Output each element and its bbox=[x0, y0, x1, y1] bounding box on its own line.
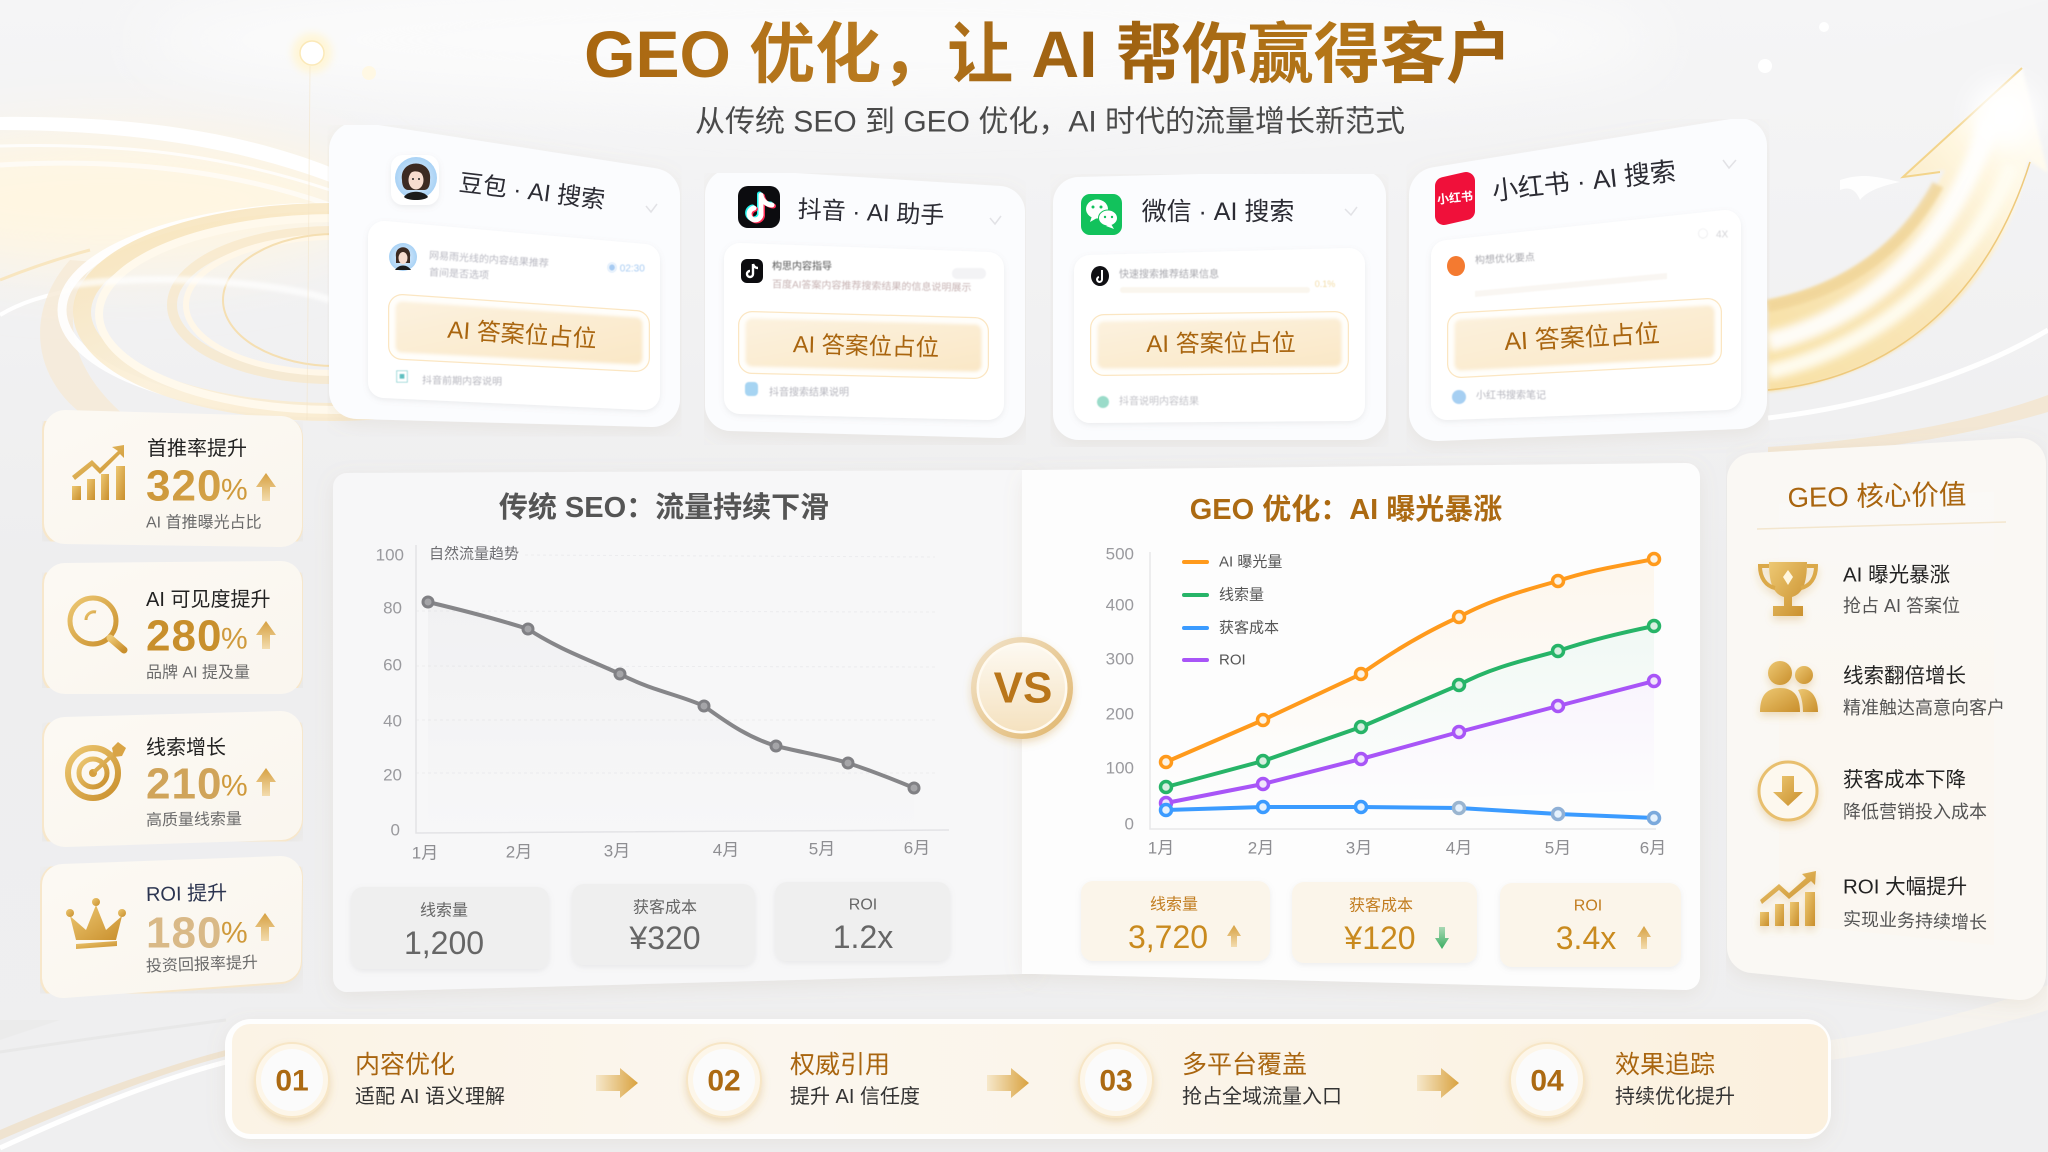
line chart: GEO metrics bbox=[1106, 544, 1666, 858]
stat: ROI up: 3.4x bbox=[1556, 920, 1616, 956]
stat: leads: 线索量 bbox=[420, 902, 468, 920]
stat: ROI bbox=[775, 882, 950, 961]
number badge: 04 bbox=[1530, 1064, 1564, 1098]
line chart: GEO metrics: 2月 bbox=[1248, 838, 1274, 858]
arrow bbox=[596, 1068, 638, 1098]
icon: crown bbox=[66, 898, 126, 949]
legend bbox=[1182, 554, 1282, 668]
line chart: GEO metrics: 0 bbox=[1125, 814, 1134, 834]
panel: traditional SEO bbox=[347, 484, 1022, 978]
stat: acquisition cost: 获客成本 bbox=[633, 898, 697, 916]
stat: acquisition cost bbox=[572, 884, 755, 965]
line chart: organic traffic: 100 bbox=[376, 546, 404, 564]
answer position box: AI 答案位占位 bbox=[1504, 320, 1660, 356]
line chart: organic traffic: 0 bbox=[391, 820, 400, 840]
card title: 抖音 · AI 助手 bbox=[797, 196, 945, 230]
number badge bbox=[687, 1043, 761, 1117]
inner result card: 0.1% bbox=[1315, 279, 1335, 289]
value: ROI lift bbox=[1760, 871, 1987, 933]
heading: 传统 SEO：流量持续下滑 bbox=[499, 491, 829, 524]
icon: xiaohongshu bbox=[1436, 181, 1474, 216]
line chart: GEO metrics: 1月 bbox=[1148, 838, 1174, 858]
line chart: GEO metrics: 3月 bbox=[1346, 838, 1372, 858]
panel: metric AI visibility bbox=[64, 582, 281, 682]
arrow up bbox=[256, 473, 276, 501]
VS badge: VS bbox=[994, 664, 1052, 712]
value: cost reduction bbox=[1759, 762, 1987, 822]
arrow bbox=[1417, 1068, 1459, 1098]
stat: leads up: 3,720 bbox=[1128, 919, 1208, 955]
panel: metric ROI bbox=[62, 877, 281, 978]
arrow up bbox=[256, 621, 276, 649]
panel: metric first recommendation: 首推率提升 bbox=[147, 437, 247, 460]
number badge bbox=[1079, 1043, 1153, 1117]
line chart: organic traffic: 自然流量趋势 bbox=[429, 546, 519, 562]
step 04: 持续优化提升 bbox=[1615, 1085, 1735, 1108]
step 02: 权威引用 bbox=[790, 1051, 890, 1079]
value: leads doubled: 线索翻倍增长 bbox=[1843, 664, 1966, 688]
icon: growth chart bbox=[1760, 871, 1816, 926]
step 01 bbox=[255, 1043, 505, 1117]
line chart: GEO metrics: 100 bbox=[1106, 758, 1134, 778]
stat: cost down: ¥120 bbox=[1343, 920, 1416, 956]
legend: AI 曝光量 bbox=[1219, 554, 1282, 570]
line chart: GEO metrics: 400 bbox=[1106, 596, 1134, 614]
answer position box bbox=[752, 325, 975, 365]
line chart: GEO metrics: 4月 bbox=[1446, 838, 1472, 858]
line chart: GEO metrics: 500 bbox=[1106, 544, 1134, 564]
value: cost reduction: 获客成本下降 bbox=[1843, 768, 1966, 792]
stat: leads bbox=[351, 887, 549, 969]
chevron bbox=[990, 216, 1001, 224]
line chart: organic traffic: 2月 bbox=[506, 842, 532, 862]
line chart: organic traffic bbox=[376, 545, 949, 862]
line chart: organic traffic: 80 bbox=[383, 598, 402, 618]
icon: douyin bbox=[738, 186, 780, 228]
chevron bbox=[646, 204, 657, 212]
icon: target bbox=[68, 742, 126, 798]
step 04 bbox=[1510, 1043, 1735, 1117]
line chart: organic traffic: 20 bbox=[383, 766, 402, 784]
stat: cost down: 获客成本 bbox=[1349, 896, 1413, 914]
arrow up bbox=[255, 913, 275, 941]
panel: metric AI visibility: AI 可见度提升 bbox=[146, 588, 270, 611]
value: AI exposure bbox=[1760, 562, 1960, 616]
value: leads doubled: 精准触达高意向客户 bbox=[1843, 698, 2005, 718]
arrow bbox=[987, 1068, 1029, 1098]
panel: metric ROI: 投资回报率提升 bbox=[146, 954, 258, 975]
heading: GEO 优化：AI 曝光暴涨 bbox=[1190, 493, 1502, 526]
panel: metric leads bbox=[64, 732, 281, 829]
card title: 微信 · AI 搜索 bbox=[1142, 198, 1294, 226]
stat: cost down bbox=[1292, 882, 1477, 963]
panel: doubao card bbox=[357, 150, 657, 399]
icon: growth bars bbox=[72, 445, 125, 500]
stat: ROI up bbox=[1500, 883, 1681, 967]
value: AI exposure: 抢占 AI 答案位 bbox=[1843, 596, 1960, 616]
value: ROI lift: ROI 大幅提升 bbox=[1843, 876, 1967, 898]
inner result card bbox=[1090, 264, 1349, 408]
panel: metric first recommendation bbox=[64, 431, 281, 532]
arrow up bbox=[256, 768, 276, 796]
step 01: 适配 AI 语义理解 bbox=[355, 1085, 505, 1108]
stat: ROI: 1.2x bbox=[833, 919, 893, 955]
step 02: 提升 AI 信任度 bbox=[790, 1085, 920, 1108]
line chart: GEO metrics: 300 bbox=[1106, 650, 1134, 668]
number badge: 02 bbox=[707, 1064, 741, 1098]
card title: 豆包 · AI 搜索 bbox=[458, 170, 606, 214]
metric value: 210 bbox=[146, 760, 222, 808]
answer position box bbox=[402, 308, 636, 358]
step 02 bbox=[687, 1043, 920, 1117]
chevron bbox=[1723, 160, 1736, 168]
value: cost reduction: 降低营销投入成本 bbox=[1843, 802, 1987, 822]
subtitle: 从传统 SEO 到 GEO 优化，AI 时代的流量增长新范式 bbox=[695, 106, 1405, 138]
metric value: 320 bbox=[146, 462, 222, 510]
metric value: % bbox=[221, 770, 248, 802]
line chart: organic traffic: 40 bbox=[383, 712, 402, 730]
panel: metric AI visibility: 品牌 AI 提及量 bbox=[146, 664, 250, 682]
step 04: 效果追踪 bbox=[1615, 1051, 1715, 1079]
icon: magnifier bbox=[70, 598, 124, 650]
line chart: GEO metrics: 200 bbox=[1106, 704, 1134, 724]
line chart: GEO metrics: 5月 bbox=[1545, 838, 1571, 858]
legend: ROI bbox=[1219, 652, 1246, 668]
line chart: organic traffic: 4月 bbox=[713, 840, 739, 860]
step 03: 抢占全域流量入口 bbox=[1182, 1085, 1342, 1108]
number badge bbox=[1510, 1043, 1584, 1117]
answer position box bbox=[1461, 312, 1708, 364]
legend: 获客成本 bbox=[1219, 620, 1279, 636]
line chart: organic traffic: 5月 bbox=[809, 840, 835, 858]
inner result card bbox=[740, 259, 988, 404]
inner result card: 抖音前期内容说明 bbox=[422, 374, 502, 388]
metric value: 180 bbox=[146, 908, 222, 958]
panel: wechat card bbox=[1079, 194, 1360, 414]
panel: GEO optimization bbox=[1022, 470, 1686, 976]
inner result card: ▣ bbox=[395, 369, 409, 385]
inner result card: 4X bbox=[1716, 230, 1729, 240]
answer position box: AI 答案位占位 bbox=[793, 331, 939, 361]
legend: 线索量 bbox=[1219, 586, 1264, 604]
value: ROI lift: 实现业务持续增长 bbox=[1843, 909, 1987, 933]
panel: douyin card bbox=[731, 186, 1001, 412]
icon: doubao avatar bbox=[391, 155, 439, 205]
line chart: GEO metrics: 6月 bbox=[1640, 838, 1666, 858]
icon: wechat bbox=[1081, 194, 1122, 235]
inner result card bbox=[1447, 226, 1729, 404]
line chart: organic traffic: 1月 bbox=[412, 844, 438, 862]
number badge: 01 bbox=[275, 1064, 309, 1098]
panel: xiaohongshu card bbox=[1436, 146, 1739, 413]
stat: ROI: ROI bbox=[849, 896, 877, 914]
title: GEO 优化，让 AI 帮你赢得客户 bbox=[584, 17, 1512, 91]
inner result card: 首间是否选项 bbox=[429, 266, 489, 282]
inner result card: ◯ bbox=[1698, 228, 1708, 240]
panel: metric leads: 线索增长 bbox=[146, 736, 226, 759]
step 03 bbox=[1079, 1043, 1342, 1117]
stat: leads up: 线索量 bbox=[1150, 896, 1198, 914]
inner result card: 构想优化要点 bbox=[1475, 250, 1535, 266]
metric value: % bbox=[221, 916, 248, 950]
metric value: % bbox=[221, 474, 248, 506]
inner result card: 小红书搜索笔记 bbox=[1476, 388, 1546, 402]
answer position box: AI 答案位占位 bbox=[1146, 330, 1296, 358]
step 03: 多平台覆盖 bbox=[1182, 1051, 1307, 1079]
VS badge bbox=[971, 637, 1073, 739]
panel: metric leads: 高质量线索量 bbox=[146, 810, 242, 829]
number badge: 03 bbox=[1099, 1064, 1133, 1098]
inner result card bbox=[384, 237, 645, 394]
line chart: organic traffic: 6月 bbox=[904, 838, 930, 858]
stat: acquisition cost: ¥320 bbox=[628, 920, 701, 956]
stat: ROI up: ROI bbox=[1574, 898, 1602, 914]
panel: metric ROI: ROI 提升 bbox=[146, 882, 227, 906]
icon: xiaohongshu: 小红书 bbox=[1436, 188, 1474, 207]
answer position box bbox=[1104, 325, 1335, 362]
step 01: 内容优化 bbox=[355, 1051, 455, 1079]
number badge bbox=[255, 1043, 329, 1117]
card title: 小红书 · AI 搜索 bbox=[1490, 156, 1678, 206]
inner result card: ◉ 02:30 bbox=[607, 262, 645, 274]
inner result card: 网易雨光线的内容结果推荐 bbox=[429, 249, 549, 270]
value: AI exposure: AI 曝光暴涨 bbox=[1843, 564, 1950, 586]
stat: leads: 1,200 bbox=[404, 925, 484, 961]
icon: trophy bbox=[1760, 562, 1816, 616]
chevron bbox=[1345, 207, 1357, 215]
metric value: 280 bbox=[146, 612, 222, 660]
inner result card: 抖音说明内容结果 bbox=[1119, 394, 1199, 408]
metric value: % bbox=[221, 622, 248, 656]
stat: leads up bbox=[1081, 881, 1270, 961]
inner result card: 快速搜索推荐结果信息 bbox=[1119, 268, 1219, 280]
inner result card: 构思内容指导 bbox=[772, 260, 832, 272]
line chart: organic traffic: 60 bbox=[383, 656, 402, 674]
answer position box: AI 答案位占位 bbox=[447, 317, 597, 353]
heading: GEO 核心价值 bbox=[1787, 479, 1967, 513]
line chart: organic traffic: 3月 bbox=[604, 842, 630, 860]
panel: GEO core value bbox=[1753, 464, 2020, 974]
icon: people bbox=[1760, 661, 1818, 712]
value: leads doubled bbox=[1760, 661, 2005, 718]
panel: metric first recommendation: AI 首推曝光占比 bbox=[146, 514, 262, 532]
inner result card: 抖音搜索结果说明 bbox=[769, 386, 849, 398]
panel: process steps bbox=[225, 1019, 1831, 1139]
inner result card: 百度AI答案内容推荐搜索结果的信息说明展示 bbox=[772, 278, 972, 294]
icon: down arrow circle bbox=[1759, 762, 1817, 820]
